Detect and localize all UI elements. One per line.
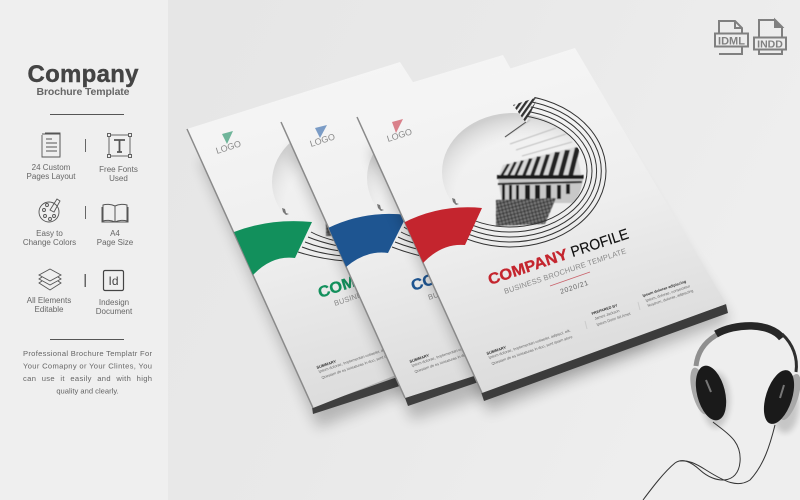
- feature: free fonts: [99, 134, 138, 183]
- ring segments: green cover: [298, 232, 345, 261]
- headphones: [643, 325, 800, 500]
- icon: document: [42, 133, 60, 157]
- left ear cup: [686, 362, 731, 424]
- description: quality and clearly.: [56, 386, 119, 396]
- label: free fonts: Free Fonts: [99, 165, 138, 174]
- colour band: blue: [328, 214, 407, 267]
- cover art: photo: [367, 154, 384, 211]
- divider: [50, 339, 124, 340]
- colour band: green: [234, 221, 312, 275]
- red rule: [550, 272, 590, 286]
- logo: blue: LOGO: [309, 132, 336, 149]
- concentric rings: [468, 97, 606, 248]
- icon: type frame: [108, 134, 132, 158]
- feature: colors: [23, 199, 76, 247]
- label: custom pages: 24 Custom: [32, 163, 71, 172]
- cover summary: green: [316, 350, 386, 379]
- label: page size: Page Size: [97, 238, 134, 247]
- logo: green: [216, 131, 240, 154]
- label: colors: Easy to: [36, 229, 63, 238]
- icon: open book: [102, 204, 128, 222]
- cover credits: James Jackson: [594, 309, 620, 321]
- cover credits: Ipsum dolorae adipiscing: [642, 279, 687, 298]
- cover credits: PREPARED BY: [591, 303, 618, 316]
- subtitle: Brochure Template: [36, 86, 130, 98]
- cover title: green: COMPANY: [316, 259, 401, 302]
- cover credits: Ipsum, dolorae, consectetur: [645, 284, 691, 303]
- logo: blue: [310, 125, 334, 147]
- feature: indesign: [96, 270, 133, 316]
- file format icons: [715, 20, 786, 54]
- feature: page size: [97, 204, 134, 247]
- description: [23, 349, 152, 396]
- logo: green: LOGO: [215, 139, 242, 156]
- divider: [50, 114, 124, 115]
- right ear cup: [758, 366, 800, 428]
- label: indesign: Document: [96, 307, 133, 316]
- description: Professional Brochure Templatr For: [23, 349, 152, 358]
- icon: Id badge: Id: [108, 274, 119, 288]
- logo: red: LOGO: [386, 127, 413, 144]
- ring segments: blue cover: [392, 226, 420, 256]
- cover title: red: [488, 228, 630, 284]
- brochure mockup: green cover: [186, 62, 412, 432]
- description: can use it easily and with high: [23, 374, 152, 383]
- label: editable: Editable: [35, 305, 64, 314]
- icon: palette: [39, 199, 60, 222]
- label: colors: Change Colors: [23, 238, 76, 247]
- icon: INDD file: INDD: [757, 38, 783, 50]
- cover summary: blue: [410, 348, 464, 373]
- brochure mockup: blue cover: [281, 55, 650, 420]
- label: page size: A4: [110, 229, 120, 238]
- cover credits: [585, 279, 694, 329]
- cover title: red: COMPANY: [486, 246, 571, 289]
- cover art: photo: [272, 143, 332, 237]
- panel: sidebar: [0, 0, 168, 500]
- icon: layers: [39, 269, 61, 290]
- icon: IDML file: IDML: [718, 36, 745, 48]
- cover subtitle: green: BUSINESS BROCHURE TEMPLATE: [333, 258, 457, 308]
- cover summary: [486, 329, 573, 366]
- cover title: red: PROFILE: [569, 226, 631, 261]
- colour band: red: [403, 207, 482, 263]
- label: indesign: Indesign: [99, 298, 129, 307]
- logo: red: [386, 119, 412, 142]
- label: free fonts: Used: [109, 174, 128, 183]
- feature: custom pages: [27, 133, 76, 181]
- cover subtitle: blue: BUSINESS BROCHURE TEMPLATE: [427, 252, 551, 302]
- label: editable: All Elements: [27, 296, 71, 305]
- separators: [84, 139, 86, 287]
- cover art: photo: [442, 97, 584, 231]
- description: Your Comapny or Your Clintes, You: [23, 362, 152, 370]
- cover title: blue: COMPANY: [409, 252, 494, 295]
- cover subtitle: BUSINESS BROCHURE TEMPLATE: [503, 246, 627, 296]
- cover credits: Ipsum Dolor Sit Amet: [596, 311, 632, 327]
- brochure mockup: red cover: [357, 48, 730, 412]
- cover date: 2020/21: [559, 280, 589, 296]
- cover credits: Nostrum, dolorae, adipiscing: [647, 289, 694, 308]
- feature: editable: [27, 269, 71, 314]
- title: Company: [28, 61, 139, 88]
- headband: [696, 325, 755, 366]
- label: custom pages: Pages Layout: [27, 172, 76, 181]
- cable: [643, 422, 775, 500]
